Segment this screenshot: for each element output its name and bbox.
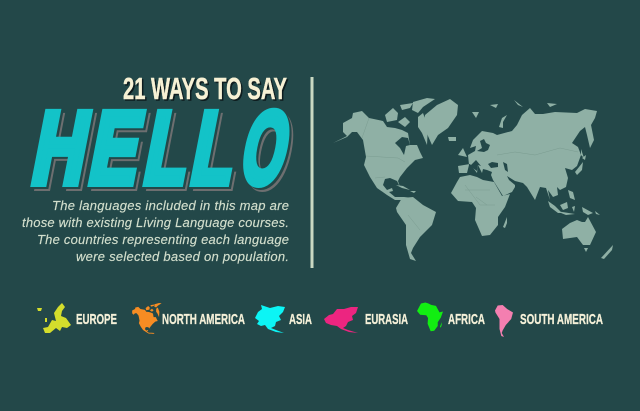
heading: HELLO: L (137, 91, 201, 205)
legend item: Africa: AFRICA (448, 312, 485, 328)
heading: HELLO (24, 91, 303, 209)
legend item: North America: NORTH AMERICA (162, 312, 245, 328)
heading: 21 ways to say: 21 WAYS TO SAY (123, 71, 287, 106)
legend item: South America: SOUTH AMERICA (520, 312, 603, 328)
legend item: Europe (37, 303, 117, 333)
intro text block (22, 198, 289, 264)
heading: HELLO: L (184, 91, 247, 205)
intro text block: were selected based on population. (76, 249, 289, 264)
heading: HELLO: E (84, 93, 154, 207)
legend item: Africa (417, 303, 485, 331)
world map (333, 98, 613, 261)
heading: HELLO: L (186, 93, 249, 207)
legend item: Eurasia (324, 307, 408, 333)
heading: HELLO: L (139, 93, 203, 207)
heading: HELLO: E (82, 91, 152, 205)
legend item: South America (495, 305, 603, 337)
heading: 21 ways to say (123, 71, 289, 108)
intro text block: The countries representing each language (37, 232, 289, 247)
heading: HELLO: O (237, 95, 303, 209)
legend (37, 303, 603, 337)
heading: 21 ways to say: 21 WAYS TO SAY (124, 72, 289, 108)
legend item: North America (132, 303, 245, 334)
heading: HELLO: L (140, 95, 205, 209)
intro text block: those with existing Living Language courses. (22, 215, 289, 230)
heading: HELLO: H (28, 95, 103, 209)
heading: HELLO: E (85, 95, 156, 209)
intro text block: The languages included in this map are (52, 198, 289, 213)
vertical divider (310, 77, 314, 268)
legend item: Eurasia: EURASIA (365, 312, 408, 328)
heading: HELLO: L (187, 95, 251, 209)
heading: HELLO: O (236, 93, 301, 207)
heading: HELLO: O (234, 91, 299, 205)
legend item: Europe: EUROPE (76, 312, 117, 328)
heading: HELLO: H (25, 91, 99, 205)
legend item: Asia (255, 305, 312, 333)
heading: HELLO: H (27, 93, 101, 207)
legend item: Asia: ASIA (289, 312, 312, 328)
